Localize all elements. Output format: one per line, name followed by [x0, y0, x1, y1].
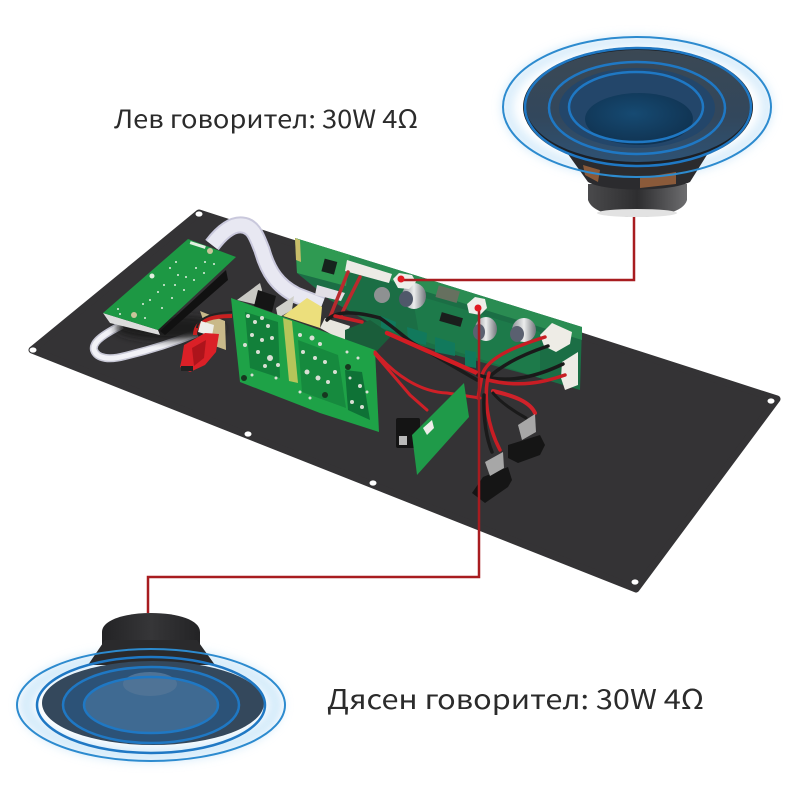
bluetooth module — [295, 238, 350, 286]
panel: black mounting plate — [30, 211, 777, 589]
amplifier main board — [295, 238, 582, 390]
speaker magnet — [102, 613, 200, 648]
heading: right speaker label: Дясен говорител: 30W 4Ω — [327, 678, 704, 717]
ribbon cable — [94, 225, 322, 358]
transformer — [283, 298, 322, 328]
speaker basket — [88, 640, 215, 665]
speaker basket — [565, 150, 710, 190]
icon: left speaker with sound rings — [503, 37, 771, 217]
heading: left speaker label: Лев говорител: 30W 4Ω — [114, 100, 418, 136]
white connector pads with red markers — [393, 273, 416, 289]
red speaker terminal — [180, 311, 232, 372]
white connectors — [345, 260, 392, 283]
display control board — [103, 239, 236, 340]
capacitors — [374, 287, 390, 303]
red connector line: right speaker — [148, 304, 482, 613]
speaker magnet — [588, 184, 687, 217]
wires — [327, 272, 565, 452]
green inductors — [407, 327, 427, 345]
speaker frame and cone — [42, 661, 264, 745]
icon: right speaker with sound rings — [17, 613, 285, 761]
sound rings — [17, 649, 285, 761]
speaker surround and cone — [523, 47, 753, 167]
switch sockets and small input board — [396, 383, 570, 503]
red connector line: left speaker — [398, 217, 634, 282]
sound rings — [503, 37, 771, 177]
power supply board — [231, 283, 392, 432]
large green capacitor — [345, 320, 392, 352]
